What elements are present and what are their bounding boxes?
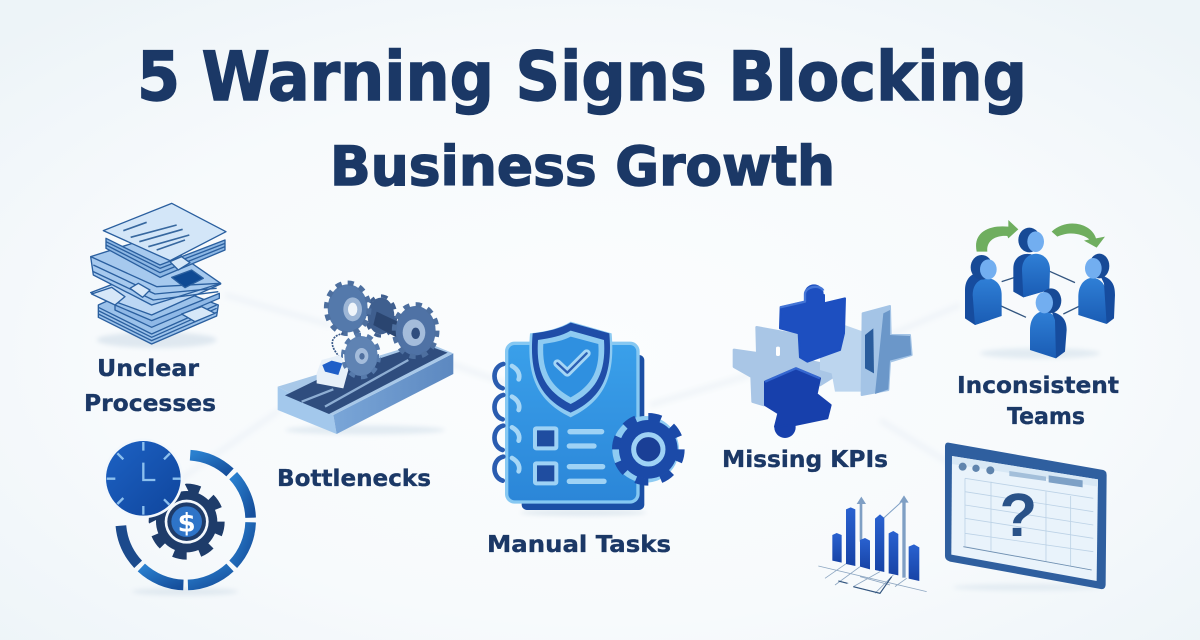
question mark: ? xyxy=(999,481,1037,550)
bars xyxy=(832,507,919,581)
label: Manual Tasks: Manual Tasks xyxy=(487,532,671,558)
person 2 xyxy=(1013,228,1050,297)
person 3 xyxy=(1078,254,1115,324)
window dots xyxy=(959,463,1083,487)
shield xyxy=(529,322,612,417)
faint connecting lines xyxy=(165,295,960,490)
label: Unclear Processes xyxy=(84,356,216,417)
icon: notebook with shield and gear xyxy=(494,322,681,516)
binder rings xyxy=(494,364,519,481)
icon: clock and money gear xyxy=(103,438,251,596)
person 1 xyxy=(965,255,1002,325)
gear front xyxy=(343,335,379,377)
trend arrows xyxy=(857,495,909,578)
label: Inconsistent Teams: Inconsistent xyxy=(957,373,1119,399)
chart floor grid xyxy=(818,563,927,593)
small car xyxy=(317,355,348,388)
gear left xyxy=(326,283,369,334)
spreadsheet grid xyxy=(965,478,1093,570)
title: Business Growth xyxy=(330,135,835,198)
light left piece xyxy=(734,327,833,405)
label: Bottlenecks: Bottlenecks xyxy=(277,466,431,492)
checklist xyxy=(535,428,604,483)
icon: monitor with question mark xyxy=(945,443,1107,591)
bottom dark piece xyxy=(765,368,831,438)
green arrows xyxy=(976,220,1105,252)
icon: puzzle pieces xyxy=(734,284,912,438)
icon: stack of papers xyxy=(91,203,226,348)
money gear: $ xyxy=(178,509,196,539)
title: 5 Warning Signs Blocking xyxy=(137,38,1027,117)
gear badge xyxy=(612,416,681,483)
label: Unclear Processes: Unclear xyxy=(97,356,200,382)
right piece xyxy=(820,306,912,395)
icon: gears on conveyor xyxy=(278,283,453,435)
label: Inconsistent Teams xyxy=(957,373,1119,430)
gear behind xyxy=(366,296,405,338)
top dark piece xyxy=(780,284,845,362)
gear right xyxy=(394,305,437,357)
icon: team of people with arrows xyxy=(965,220,1115,359)
clock xyxy=(103,438,183,518)
segmented ring xyxy=(121,455,251,585)
money gear xyxy=(153,488,221,556)
person 4 xyxy=(1030,288,1067,358)
title xyxy=(137,38,1027,198)
label: Missing KPIs: Missing KPIs xyxy=(722,447,888,473)
label: Inconsistent Teams: Teams xyxy=(1007,404,1085,430)
label: Unclear Processes: Processes xyxy=(84,391,216,417)
icon: bar chart xyxy=(818,495,927,593)
